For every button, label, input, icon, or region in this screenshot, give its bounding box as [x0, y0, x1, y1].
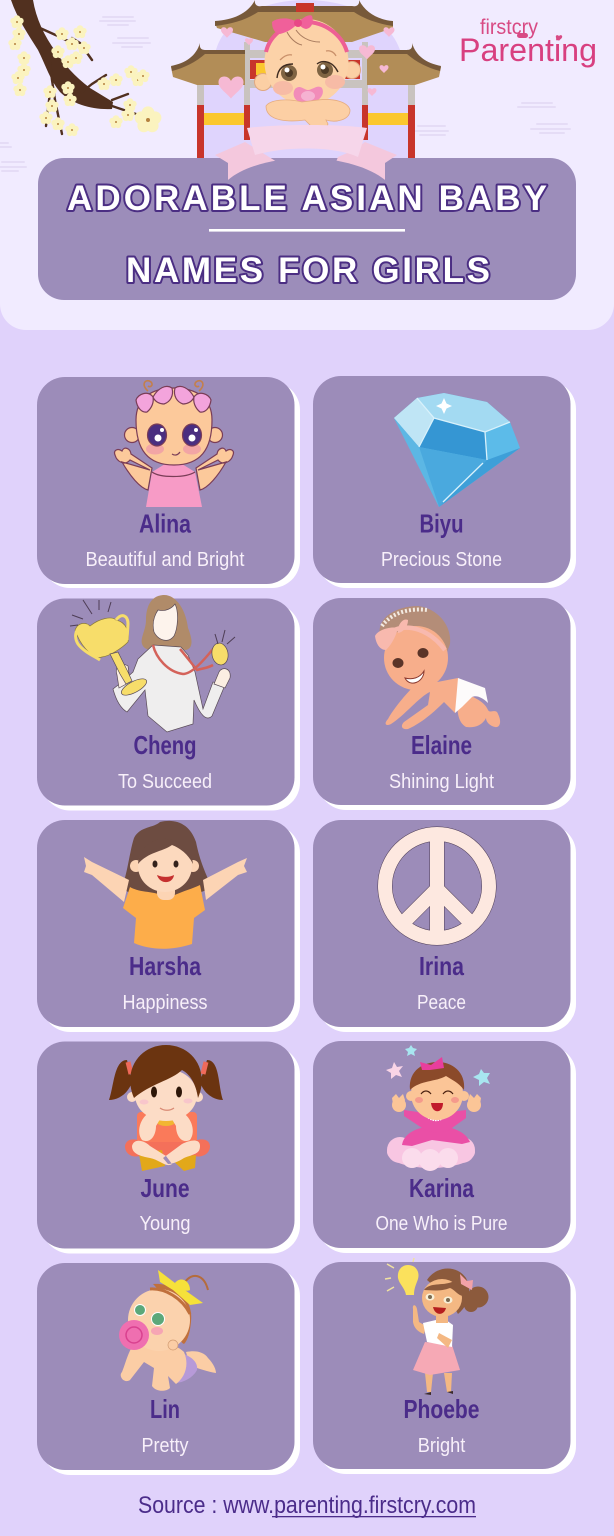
card: Phoebe: [313, 1258, 576, 1474]
name and meaning: Phoebe: [404, 1394, 480, 1424]
heading: [67, 179, 547, 290]
icon: girl with pigtails: [109, 1045, 223, 1171]
icon: diamond: [394, 393, 520, 507]
name and meaning: Cheng: [134, 730, 196, 760]
icon: crawling baby: [375, 606, 500, 729]
name and meaning: [417, 951, 466, 1014]
name and meaning: Peace: [417, 991, 466, 1014]
name and meaning: Elaine: [411, 730, 472, 760]
name and meaning: [86, 508, 245, 571]
logo: FirstCry Parenting: firstcry: [480, 16, 538, 39]
card: Karina: [313, 1041, 576, 1253]
name and meaning: Harsha: [129, 951, 201, 981]
icon: happy girl with raised arms: [84, 821, 247, 949]
ribbon: [215, 125, 397, 190]
card: Cheng: [37, 595, 300, 810]
illustration: pagoda: [171, 0, 441, 158]
name and meaning: Biyu: [420, 508, 464, 538]
source line: Source : www.parenting.firstcry.com: [138, 1492, 476, 1519]
name and meaning: [376, 1173, 508, 1235]
name and meaning: Karina: [409, 1173, 474, 1203]
name and meaning: Precious Stone: [381, 548, 502, 571]
illustration: baby with pacifier: [254, 15, 360, 129]
card: June: [37, 1042, 300, 1254]
name and meaning: Alina: [139, 508, 191, 538]
name and meaning: Pretty: [142, 1434, 189, 1457]
heading: ADORABLE ASIAN BABY: [67, 179, 547, 218]
icon: peace sign: [385, 834, 489, 938]
card: Lin: [37, 1263, 300, 1475]
icon: baby girl with bows: [115, 381, 233, 507]
heading: NAMES FOR GIRLS: [126, 251, 490, 290]
card: Harsha: [37, 820, 300, 1032]
name and meaning: [389, 730, 494, 793]
name and meaning: [404, 1394, 480, 1457]
name and meaning: [140, 1173, 190, 1235]
logo: FirstCry Parenting: Parenting: [459, 32, 597, 68]
name and meaning: Shining Light: [389, 770, 494, 793]
name and meaning: To Succeed: [118, 770, 212, 793]
name and meaning: Lin: [150, 1394, 180, 1424]
card: Irina: [313, 820, 576, 1032]
name and meaning: June: [140, 1173, 190, 1203]
name and meaning: Happiness: [122, 991, 208, 1014]
name and meaning: [142, 1394, 189, 1457]
icon: woman with trophy and medal: [70, 595, 235, 732]
name and meaning: [118, 730, 212, 793]
icon: baby on a cloud: [386, 1045, 490, 1171]
name and meaning: Irina: [419, 951, 464, 981]
name and meaning: Young: [140, 1212, 190, 1235]
name and meaning: [381, 508, 502, 571]
icon: girl with light bulb: [385, 1258, 488, 1395]
illustration: blossom branch: [8, 0, 161, 136]
name and meaning: Beautiful and Bright: [86, 548, 245, 571]
name and meaning: [122, 951, 208, 1014]
card: Alina: [37, 377, 300, 588]
panel: title: [38, 125, 576, 300]
header background panel: [0, 0, 614, 330]
card: Biyu: [313, 376, 576, 588]
logo: FirstCry Parenting: [459, 16, 597, 68]
name and meaning: One Who is Pure: [376, 1212, 508, 1235]
icon: crawling baby with pacifier: [119, 1270, 216, 1391]
card: Elaine: [313, 598, 576, 810]
name and meaning: Bright: [418, 1434, 466, 1457]
